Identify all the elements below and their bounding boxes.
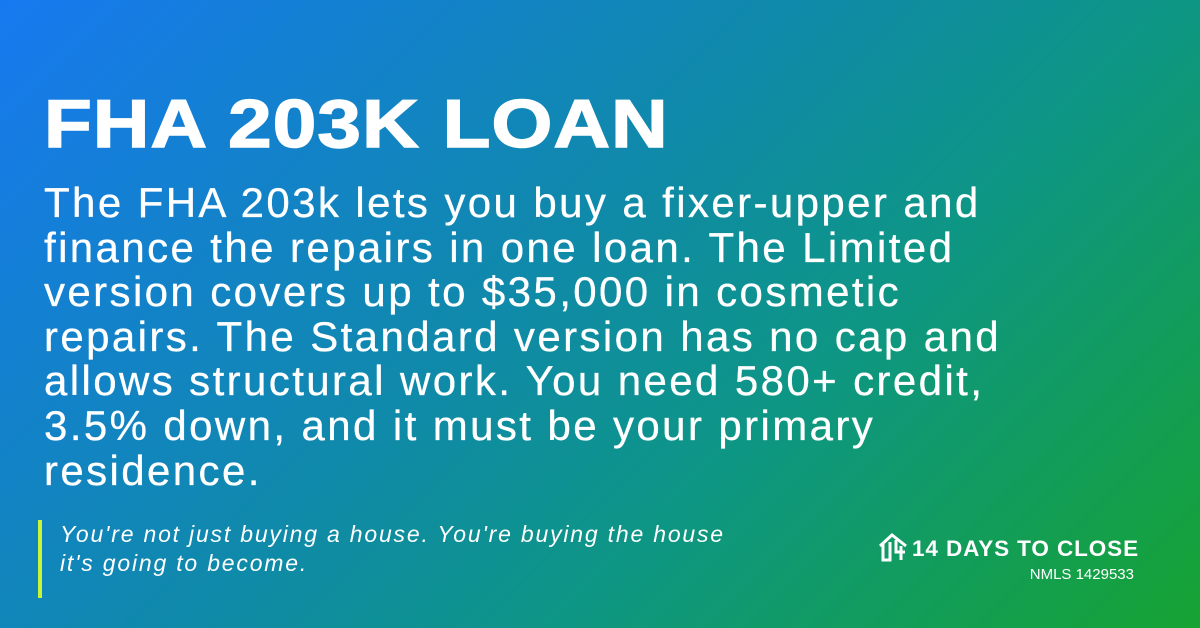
title: FHA 203K LOAN xyxy=(44,86,669,162)
body text xyxy=(44,179,1001,494)
logo text: 14 DAYS TO CLOSE xyxy=(912,536,1139,561)
body text: 3.5% down, and it must be your primary xyxy=(44,402,875,449)
body text: residence. xyxy=(44,447,262,494)
body text: repairs. The Standard version has no cap and xyxy=(44,313,1001,360)
body text: The FHA 203k lets you buy a fixer-upper and xyxy=(44,179,981,226)
NMLS: NMLS 1429533 xyxy=(1030,566,1134,583)
body text: finance the repairs in one loan. The Limited xyxy=(44,224,954,271)
quote: it's going to become. xyxy=(60,550,308,576)
quote xyxy=(60,521,725,576)
body text: version covers up to $35,000 in cosmetic xyxy=(44,268,901,315)
icon: house 14 xyxy=(879,533,907,562)
logo xyxy=(879,533,1139,583)
quote accent bar xyxy=(38,520,42,598)
quote: You're not just buying a house. You're buying the house xyxy=(60,521,725,547)
body text: allows structural work. You need 580+ credit, xyxy=(44,357,984,404)
